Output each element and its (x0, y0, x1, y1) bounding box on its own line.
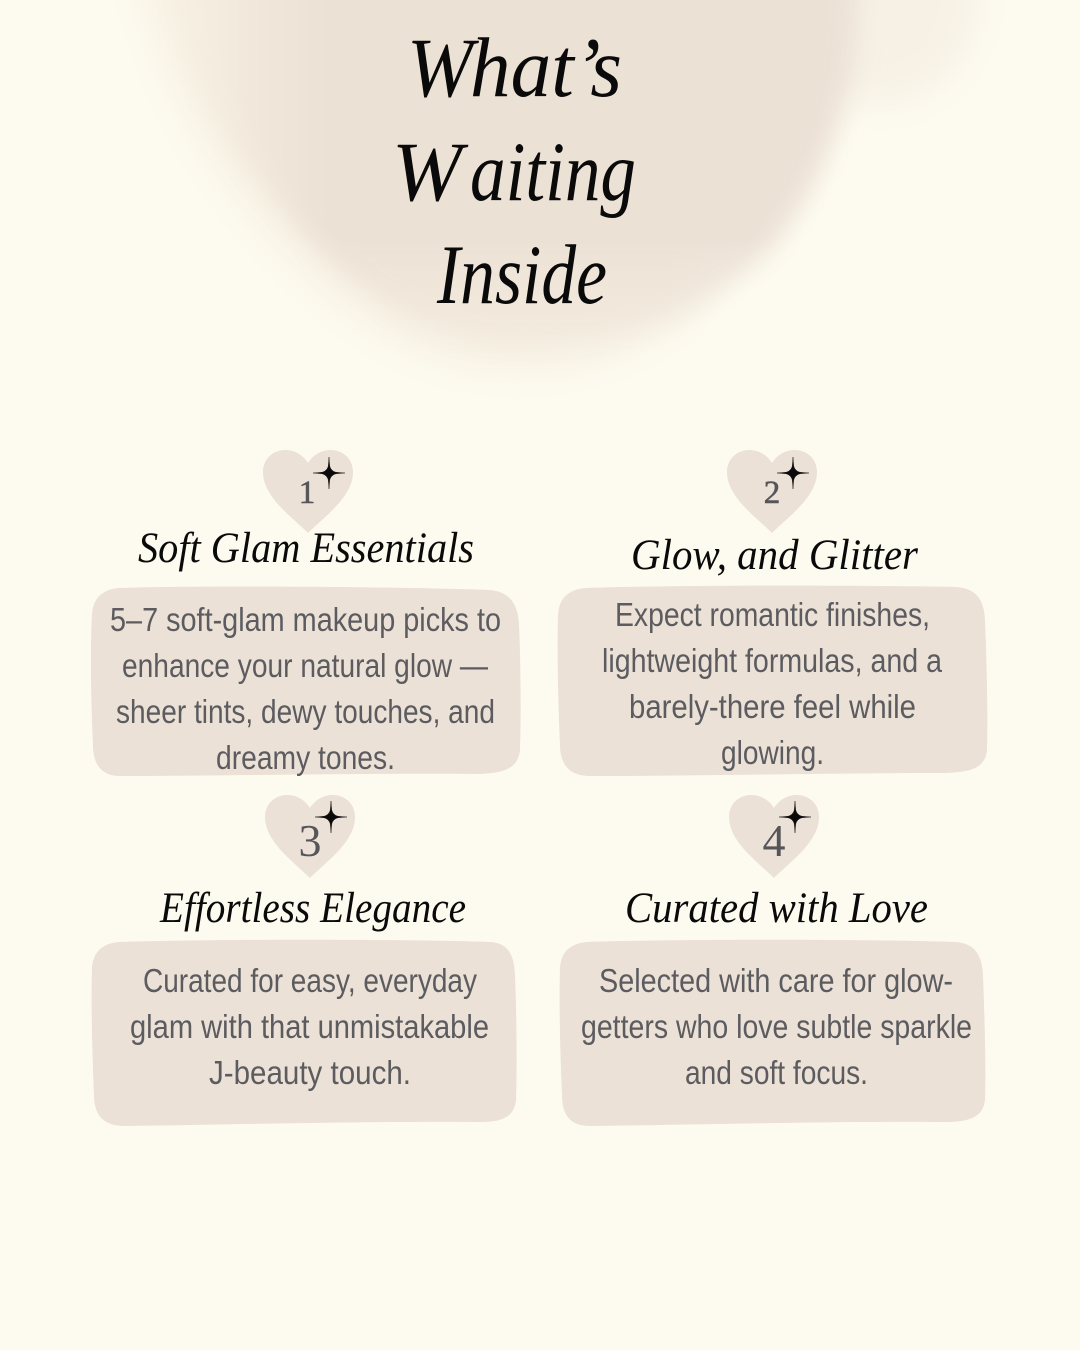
text box: barely-there feel while (629, 688, 916, 725)
icon: heart 1 (263, 450, 353, 533)
title: W (392, 125, 469, 219)
title: W (407, 21, 480, 115)
text box (558, 586, 987, 776)
panel: effortless elegance (92, 795, 517, 1126)
text box: J-beauty touch. (209, 1054, 411, 1091)
heading: Curated with Love (625, 885, 928, 932)
panel: curated with love (560, 795, 985, 1126)
text box: glam with that unmistakable (130, 1008, 489, 1045)
text box (91, 587, 521, 776)
icon: heart 4 (729, 795, 819, 878)
text box: dreamy tones. (216, 739, 395, 776)
text box: getters who love subtle sparkle (581, 1008, 972, 1045)
icon: heart 1: 1 (299, 475, 315, 511)
icon: heart 2: 2 (764, 475, 780, 511)
title (392, 21, 636, 322)
text box (92, 940, 517, 1126)
text box: enhance your natural glow — (122, 647, 488, 684)
title: Inside (436, 228, 607, 322)
text box: Curated for easy, everyday (143, 962, 477, 999)
text box: glowing. (721, 734, 824, 771)
decorative blurred blob behind title (130, 0, 980, 372)
heading: Soft Glam Essentials (138, 525, 474, 572)
heading: Effortless Elegance (159, 885, 466, 932)
text box (560, 940, 985, 1126)
title: aiting (470, 125, 636, 219)
text box: Selected with care for glow- (599, 962, 953, 999)
heading: Glow, and Glitter (631, 532, 918, 579)
icon: heart 2 (727, 450, 817, 533)
panel: glow and glitter (558, 450, 987, 776)
icon: heart 3: 3 (298, 815, 322, 866)
icon: heart 4: 4 (762, 815, 786, 866)
text box: 5–7 soft-glam makeup picks to (110, 601, 501, 638)
icon: heart 3 (265, 795, 355, 878)
text box: Expect romantic finishes, (615, 596, 930, 633)
text box: sheer tints, dewy touches, and (116, 693, 495, 730)
text box: and soft focus. (685, 1054, 868, 1091)
panel: soft glam essentials (91, 450, 521, 776)
title: hat’s (470, 21, 622, 115)
text box: lightweight formulas, and a (602, 642, 943, 679)
